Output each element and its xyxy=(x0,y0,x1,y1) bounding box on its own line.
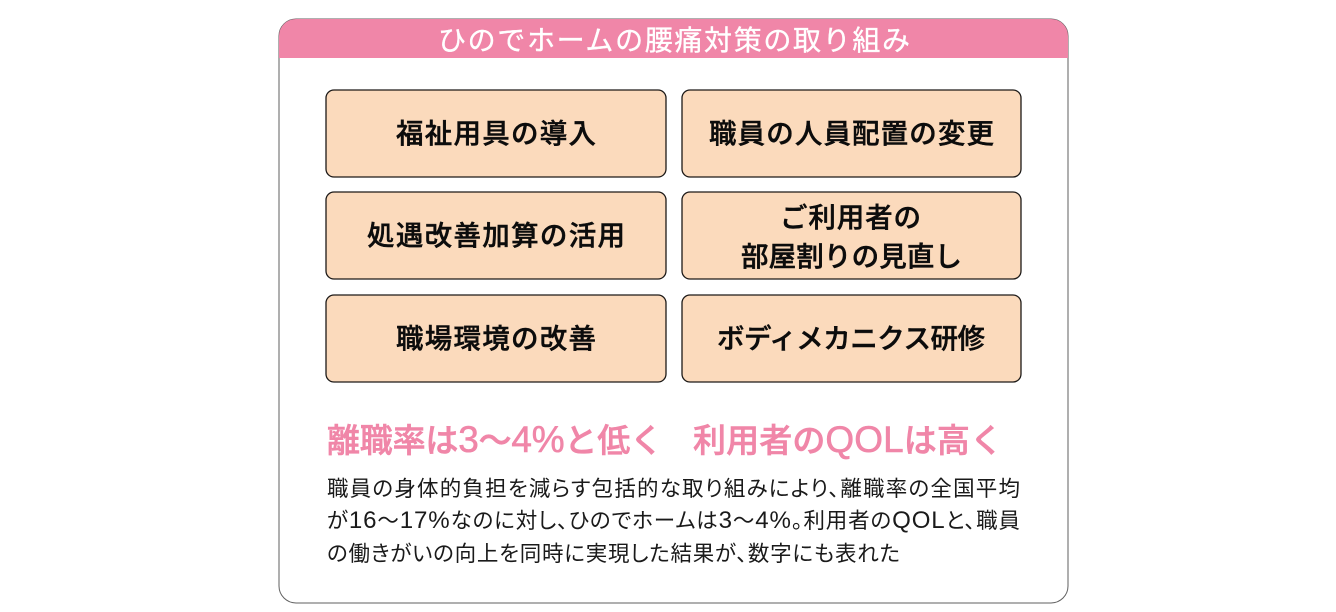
result heading: 離職率は3～4%と低く xyxy=(327,419,663,460)
body text xyxy=(327,477,1020,566)
panel: main card xyxy=(279,19,1068,603)
box: ボディメカニクス研修 xyxy=(682,295,1021,382)
body text: が16～17%なのに対し、ひのでホームは3～4%。利用者のQOLと、職員 xyxy=(327,507,1020,534)
box: ご利用者の部屋割りの見直し: 部屋割りの見直し xyxy=(741,241,962,272)
box: 職場環境の改善: 職場環境の改善 xyxy=(396,323,596,354)
box: ご利用者の部屋割りの見直し xyxy=(682,192,1021,279)
box: 職員の人員配置の変更: 職員の人員配置の変更 xyxy=(709,118,994,149)
box: 福祉用具の導入 xyxy=(326,90,666,177)
body text: の働きがいの向上を同時に実現した結果が、数字にも表れた xyxy=(327,542,900,566)
box: 職員の人員配置の変更 xyxy=(682,90,1021,177)
box: ボディメカニクス研修: ボディメカニクス研修 xyxy=(717,323,986,354)
box: ご利用者の部屋割りの見直し: ご利用者の xyxy=(780,202,921,233)
body text: 職員の身体的負担を減らす包括的な取り組みにより、離職率の全国平均 xyxy=(327,477,1020,501)
box: 処遇改善加算の活用 xyxy=(326,192,666,279)
box: 福祉用具の導入: 福祉用具の導入 xyxy=(396,118,596,149)
result heading xyxy=(327,419,1003,460)
box: 処遇改善加算の活用: 処遇改善加算の活用 xyxy=(367,220,625,251)
box: 職場環境の改善 xyxy=(326,295,666,382)
title: ひのでホームの腰痛対策の取り組み xyxy=(438,25,910,56)
panel header band xyxy=(279,19,1068,58)
result heading: 利用者のQOLは高く xyxy=(693,419,1003,460)
